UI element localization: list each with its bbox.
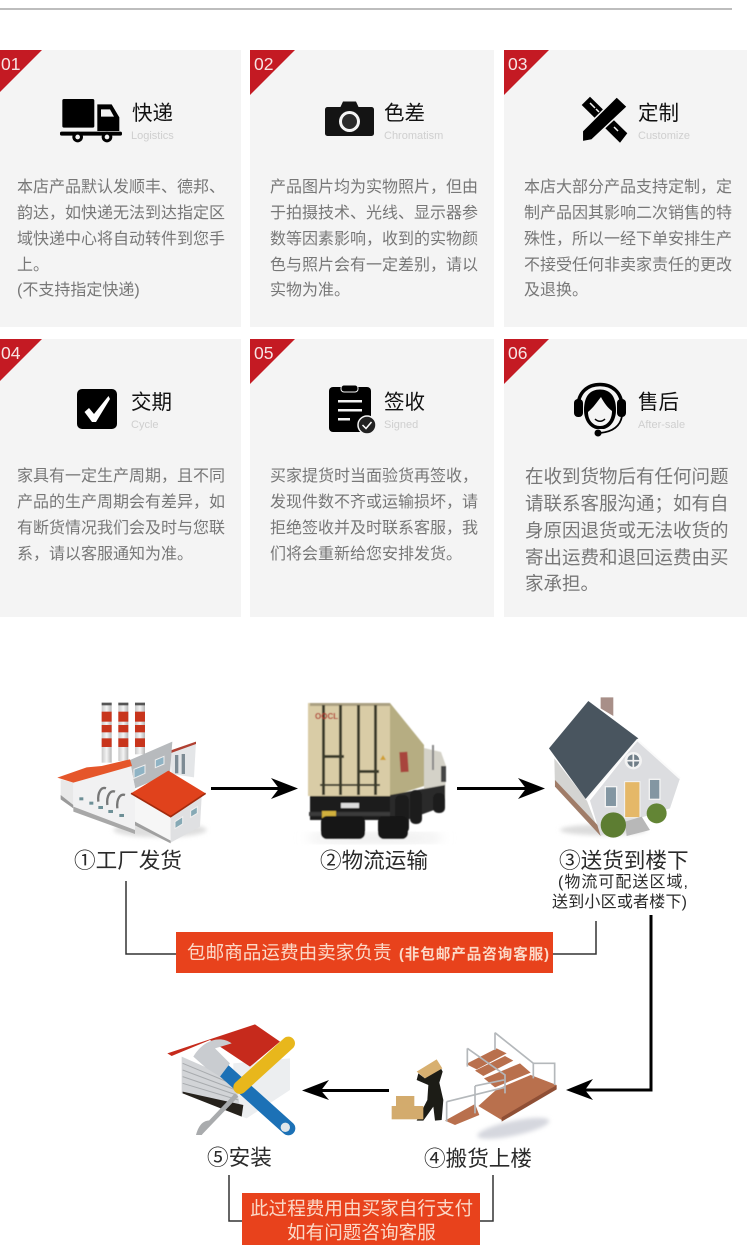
text: color difference: 实物为准。 [270,281,350,299]
badge 02 [250,50,295,95]
text: color difference: 数等因素影响，收到的实物颜 [270,230,478,248]
text: signed: 发现件数不齐或运输损坏，请 [270,493,478,511]
arrow: stairs to install [302,1080,389,1100]
text: signed: 买家提货时当面验货再签收， [270,467,478,485]
badge 01: 01 [1,54,20,74]
label: step 5: ⑤安装 [207,1145,272,1170]
badge 06: 06 [508,343,527,363]
text: cycle: 有断货情况我们会及时与您联 [17,519,225,537]
arrow: factory to logistics [211,778,298,799]
heading: after-sale: 售后 [638,391,679,414]
text: customize: 本店大部分产品支持定制，定 [524,178,732,196]
heading: color difference: 色差 [384,102,425,125]
badge 02: 02 [254,54,273,74]
connector: free shipping bracket [126,881,596,954]
icon: ruler and pencil [582,97,627,143]
text: after-sale: 在收到货物后有任何问题 [525,466,729,487]
badge 03 [504,50,549,95]
illustration: container truck [305,703,446,842]
icon: headset agent [574,384,626,436]
icon: checkbox [77,389,117,429]
label: step 3: ③送货到楼下 [559,848,689,873]
text: logistics: (不支持指定快递) [17,281,140,299]
text: logistics [17,178,225,299]
label: step 3 [552,848,689,911]
subheading: logistics: Logistics [131,130,174,142]
text: logistics: 域快递中心将自动转件到您手 [17,230,225,248]
badge 01 [0,50,42,92]
text: color difference: 产品图片均为实物照片，但由 [270,178,478,196]
connector: self-paid bracket [229,1175,493,1221]
heading: cycle: 交期 [131,391,172,414]
label: step 2: ②物流运输 [320,848,428,873]
callout: self-paid: 此过程费用由买家自行支付 [250,1198,473,1219]
illustration: house [549,697,680,838]
text: customize [524,178,732,299]
heading: signed: 签收 [384,391,425,414]
illustration: factory [57,703,207,843]
panel: color difference [250,50,494,327]
subheading: signed: Signed [384,419,418,431]
label: step 3: 送到小区或者楼下) [552,893,687,911]
badge 05: 05 [254,343,273,363]
text: signed: 们将会重新给您安排发货。 [270,545,462,563]
icon: truck [60,99,122,142]
callout: self-paid [242,1193,480,1245]
label: step 3: (物流可配送区域, [558,873,688,891]
text: cycle: 系，请以客服通知为准。 [17,545,193,563]
text: signed [270,467,478,563]
callout: free shipping: (非包邮产品咨询客服) [399,945,549,963]
text: signed: 拒绝签收并及时联系客服，我 [270,519,478,537]
arrow: logistics to home [457,778,545,799]
text: cycle [17,467,225,563]
text: after-sale: 身原因退货或无法收货的 [525,520,729,541]
label: step 4: ④搬货上楼 [424,1146,532,1171]
icon: camera [325,102,374,136]
text: color difference: 色与照片会有一定差别，请以 [270,256,478,274]
badge 03: 03 [508,54,527,74]
text: cycle: 家具有一定生产周期，且不同 [17,467,225,485]
badge 04: 04 [1,343,21,363]
text: customize: 及退换。 [524,281,588,299]
callout: self-paid: 如有问题咨询客服 [287,1222,436,1243]
heading: logistics: 快递 [132,102,173,125]
text: color difference [270,178,478,299]
subheading: cycle: Cycle [131,419,159,431]
callout: free shipping: 包邮商品运费由卖家负责 [187,942,392,963]
text: customize: 不接受任何非卖家责任的更改 [524,256,732,274]
text: cycle: 产品的生产周期会有差异，如 [17,493,225,511]
heading: customize: 定制 [638,102,679,125]
subheading: customize: Customize [638,130,690,142]
panel: logistics [0,50,241,327]
label: step 1: ①工厂发货 [74,848,182,873]
text: after-sale: 寄出运费和退回运费由买 [525,547,729,568]
badge 04 [0,339,42,381]
panel: after-sale [504,339,747,617]
panel: signed [250,339,494,617]
arrow: home to stairs [566,915,651,1100]
text: after-sale: 请联系客服沟通；如有自 [525,493,729,514]
subheading: color difference: Chromatism [384,130,443,142]
text: color difference: 于拍摄技术、光线、显示器参 [270,204,478,222]
text: after-sale: 家承担。 [525,573,599,594]
subheading: after-sale: After-sale [638,419,685,431]
text: logistics: 上。 [17,256,49,274]
text: customize: 殊性，所以一经下单安排生产 [524,230,732,248]
icon: clipboard [329,385,376,434]
text: customize: 制产品因其影响二次销售的特 [524,204,732,222]
text: after-sale [525,466,729,594]
badge 05 [250,339,295,384]
illustration: stairs and porter [392,1033,557,1143]
text: logistics: 本店产品默认发顺丰、德邦、 [17,178,225,196]
text: logistics: 韵达，如快递无法到达指定区 [17,204,225,222]
panel: cycle [0,339,241,617]
callout: free shipping [176,932,553,973]
panel: customize [504,50,747,327]
illustration: container truck: OOCL [315,712,338,721]
badge 06 [504,339,549,384]
illustration: tools and garage [167,1024,290,1135]
